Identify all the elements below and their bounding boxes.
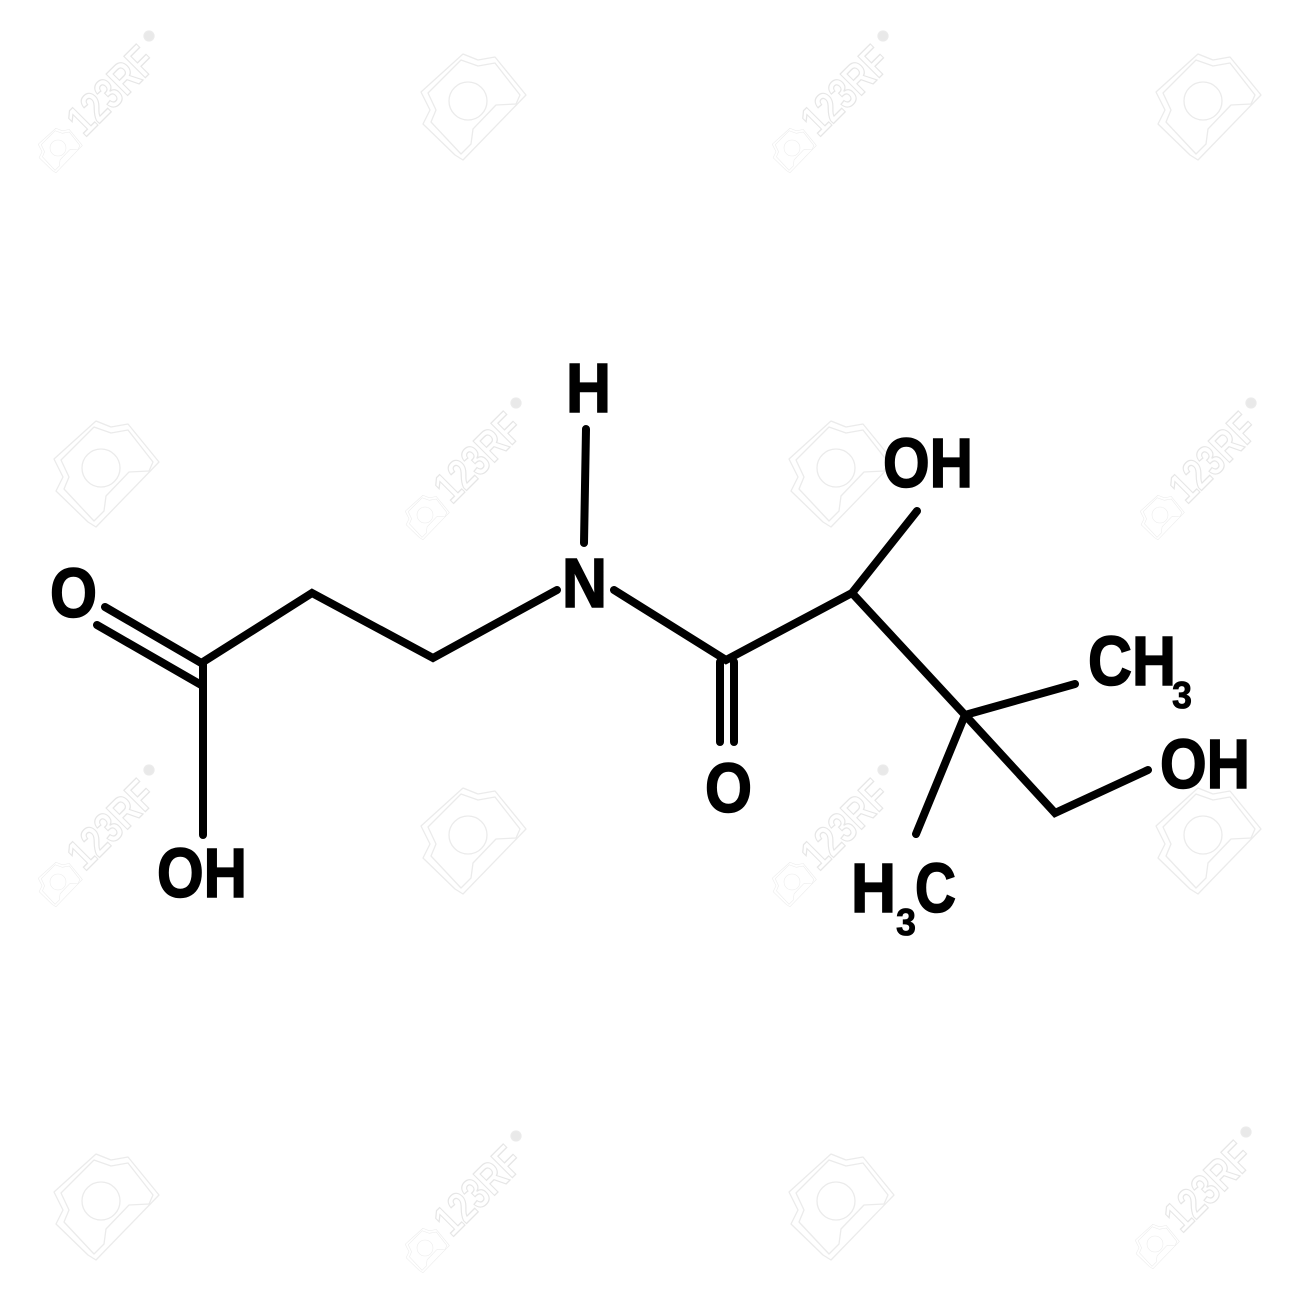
- atom label: O (carboxyl): O: [50, 554, 97, 632]
- atom label: H3C: C: [915, 849, 956, 927]
- atom label: O (amide): O: [705, 749, 752, 827]
- molecule bonds: [97, 429, 1148, 835]
- atom label: CH3: 3: [1172, 675, 1192, 717]
- atom label: H3C: [851, 849, 956, 944]
- atom label: H on nitrogen: H: [566, 349, 611, 427]
- atom label: CH3: CH: [1088, 622, 1176, 700]
- watermark: 123RF wordmarks: 123RF: [424, 404, 533, 512]
- atom label: H3C: H: [851, 849, 896, 927]
- watermark: 123RF wordmarks: 123RF: [57, 37, 166, 145]
- atom label: N: N: [562, 544, 607, 622]
- watermark: 123RF wordmarks: 123RF: [1159, 404, 1268, 512]
- watermark: 123RF wordmarks: 123RF: [1154, 1133, 1263, 1241]
- atom label: OH (upper): OH: [883, 424, 973, 502]
- watermark: 123RF wordmarks: 123RF: [424, 1137, 533, 1245]
- atom label: OH (carboxyl): OH: [157, 834, 247, 912]
- watermark: 123RF wordmarks: 123RF: [57, 771, 166, 879]
- watermark: 123RF wordmarks: 123RF: [791, 771, 900, 879]
- atom label: OH (right): OH: [1160, 725, 1250, 803]
- watermark: 123RF wordmarks: 123RF: [791, 37, 900, 145]
- atom label: H3C: 3: [896, 902, 916, 944]
